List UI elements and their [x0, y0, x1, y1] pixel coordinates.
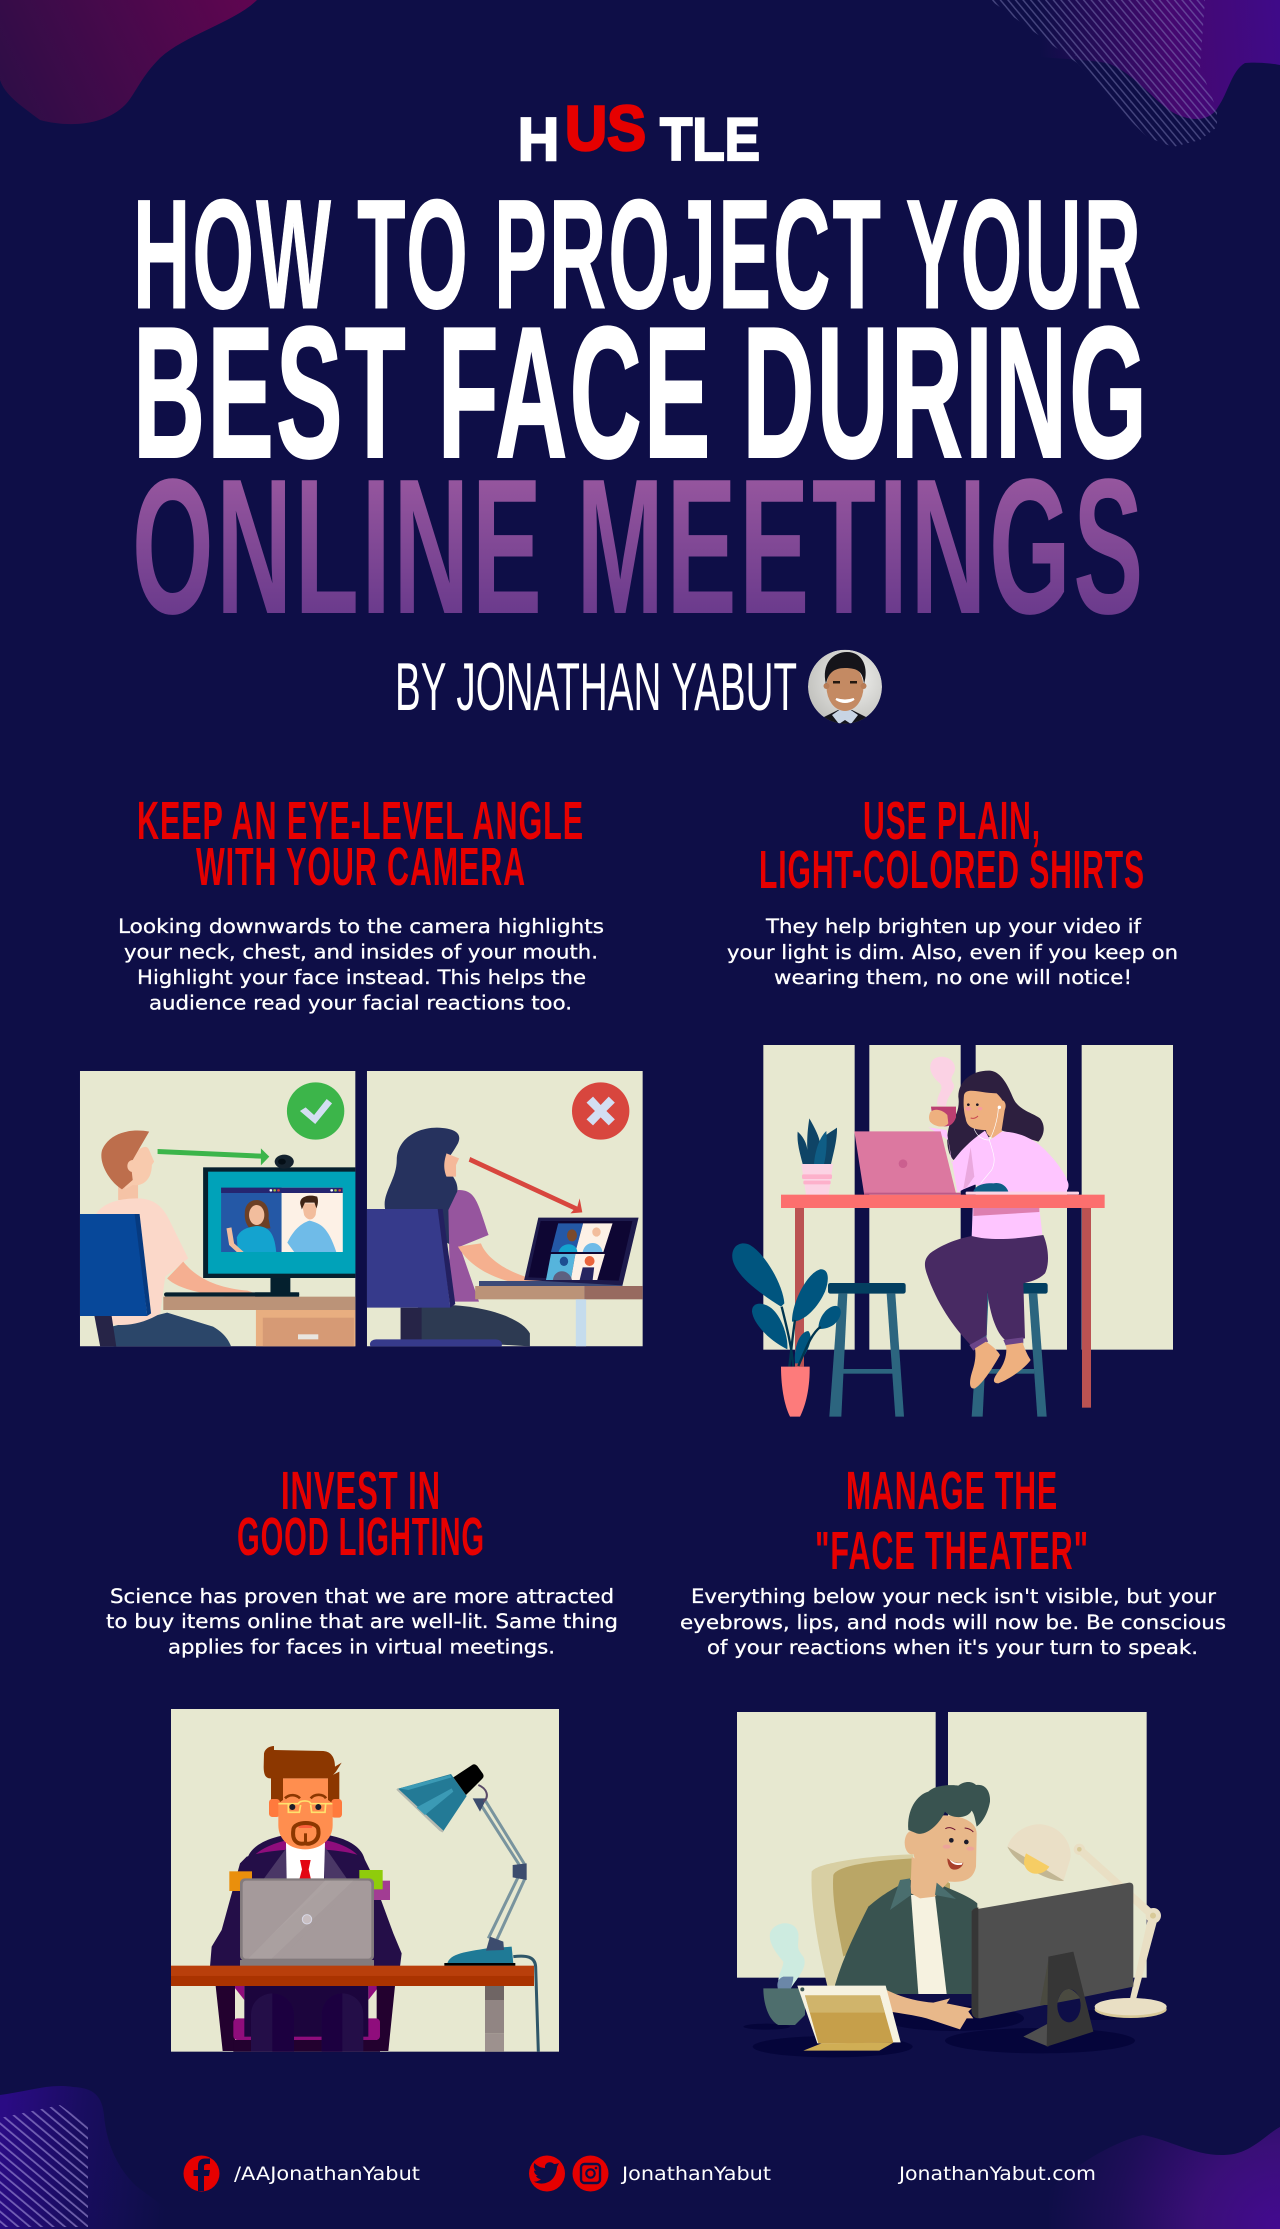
illustration: man smiling at monitor	[737, 1712, 1167, 2057]
laptop	[854, 1131, 961, 1195]
illustration: low laptop angle	[367, 1071, 643, 1349]
title	[132, 168, 1149, 654]
coffee cup with steam	[763, 1923, 805, 2025]
panel: eye-level angle heading: KEEP AN EYE-LEVEL ANGLE	[137, 791, 584, 851]
person: man at monitor	[96, 1131, 265, 1346]
steam and coffee cup	[929, 1057, 956, 1127]
head with glasses and goatee	[264, 1746, 342, 1849]
text: eye-level angle body: Highlight your face instead. This helps the	[137, 966, 586, 989]
icon: cross badge	[572, 1082, 629, 1140]
laptop with video call	[479, 1218, 639, 1286]
logo: Hustle: TLE	[660, 106, 760, 173]
text: eye-level angle body: audience read your facial reactions too.	[149, 992, 572, 1014]
panel: face theater heading	[815, 1461, 1089, 1581]
lower chair and legs	[216, 1986, 395, 2052]
window panels	[763, 1045, 1173, 1350]
footer: social links	[184, 2156, 1096, 2192]
logo: Hustle	[518, 94, 760, 173]
table top	[781, 1195, 1105, 1208]
video call window	[221, 1188, 343, 1252]
text: plain shirts body	[727, 915, 1178, 989]
background blob: top left	[0, 0, 257, 124]
floor plant	[732, 1243, 841, 1417]
sticky notes	[229, 1870, 390, 1900]
logo: Hustle: US	[565, 94, 646, 164]
background blob: bottom right	[1049, 2127, 1280, 2229]
webcam	[275, 1155, 294, 1169]
text: face theater body	[680, 1585, 1226, 1659]
desk lamp	[397, 1764, 538, 2052]
panel: plain shirts heading	[759, 791, 1145, 900]
panel: eye-level angle heading	[137, 791, 584, 897]
text: face theater body: Everything below your neck isn't visible, but your	[691, 1585, 1217, 1608]
illustration: man with desk lamp	[171, 1709, 559, 2052]
woman at laptop	[925, 1071, 1079, 1389]
illustration: correct camera angle	[80, 1071, 361, 1346]
text: plain shirts body: wearing them, no one will notice!	[774, 966, 1132, 989]
desk	[171, 1966, 534, 2052]
panel: plain shirts heading: USE PLAIN,	[863, 791, 1041, 851]
desk and drawer	[163, 1292, 355, 1346]
panel: good lighting heading	[237, 1461, 485, 1567]
logo: Hustle: H	[518, 106, 559, 173]
icon: twitter	[529, 2156, 565, 2192]
office chair	[80, 1214, 151, 1346]
text: face theater body: of your reactions when it's your turn to speak.	[707, 1636, 1198, 1659]
panel: good lighting heading: GOOD LIGHTING	[237, 1507, 485, 1567]
computer monitor	[972, 1883, 1133, 2047]
text: good lighting body: to buy items online that are well-lit. Same thing	[106, 1610, 618, 1633]
illustration: woman with coffee at table	[732, 1045, 1173, 1417]
text: good lighting body: Science has proven that we are more attracted	[110, 1585, 614, 1608]
text: good lighting body: applies for faces in virtual meetings.	[168, 1636, 555, 1658]
desk lamp	[1007, 1824, 1167, 2018]
text: eye-level angle body: your neck, chest, and insides of your mouth.	[124, 940, 598, 964]
text: facebook handle: /AAJonathanYabut	[234, 2163, 420, 2185]
panel: face theater heading: MANAGE THE	[846, 1461, 1058, 1521]
chair and body	[210, 1833, 402, 1967]
icon: check badge	[287, 1082, 344, 1140]
stools	[828, 1283, 1048, 1417]
window panels	[737, 1712, 1147, 1978]
icon: facebook	[184, 2156, 220, 2192]
laptop	[240, 1878, 374, 1966]
person: woman at laptop	[384, 1128, 541, 1346]
floor shadows	[743, 2006, 1135, 2057]
byline: BY JONATHAN YABUT	[395, 649, 797, 725]
man smiling	[835, 1782, 990, 2029]
icon: instagram	[572, 2156, 608, 2192]
avatar portrait	[808, 650, 882, 730]
chair	[811, 1854, 950, 1990]
arrow: green sight line	[158, 1148, 269, 1165]
background blob: top right	[990, 0, 1280, 147]
desktop monitor	[203, 1155, 361, 1297]
text: face theater body: eyebrows, lips, and nods will now be. Be conscious	[680, 1611, 1226, 1634]
text: twitter and instagram handle: JonathanYabut	[621, 2163, 771, 2185]
office chair	[367, 1209, 502, 1349]
text: plain shirts body: They help brighten up your video if	[765, 915, 1142, 938]
text: plain shirts body: your light is dim. Also, even if you keep on	[727, 941, 1178, 964]
desk	[475, 1286, 643, 1346]
pot plant on table	[797, 1118, 837, 1195]
tablet	[797, 1986, 901, 2051]
text: website: JonathanYabut.com	[898, 2163, 1096, 2185]
table legs	[795, 1208, 1091, 1408]
panel: eye-level angle heading: WITH YOUR CAMERA	[196, 837, 526, 897]
text: eye-level angle body	[118, 915, 604, 1014]
arrow: red sight line	[469, 1157, 582, 1213]
text: eye-level angle body: Looking downwards to the camera highlights	[118, 915, 604, 938]
background blob: bottom left	[0, 2086, 196, 2229]
text: good lighting body	[106, 1585, 618, 1658]
panel: good lighting heading: INVEST IN	[281, 1461, 441, 1521]
